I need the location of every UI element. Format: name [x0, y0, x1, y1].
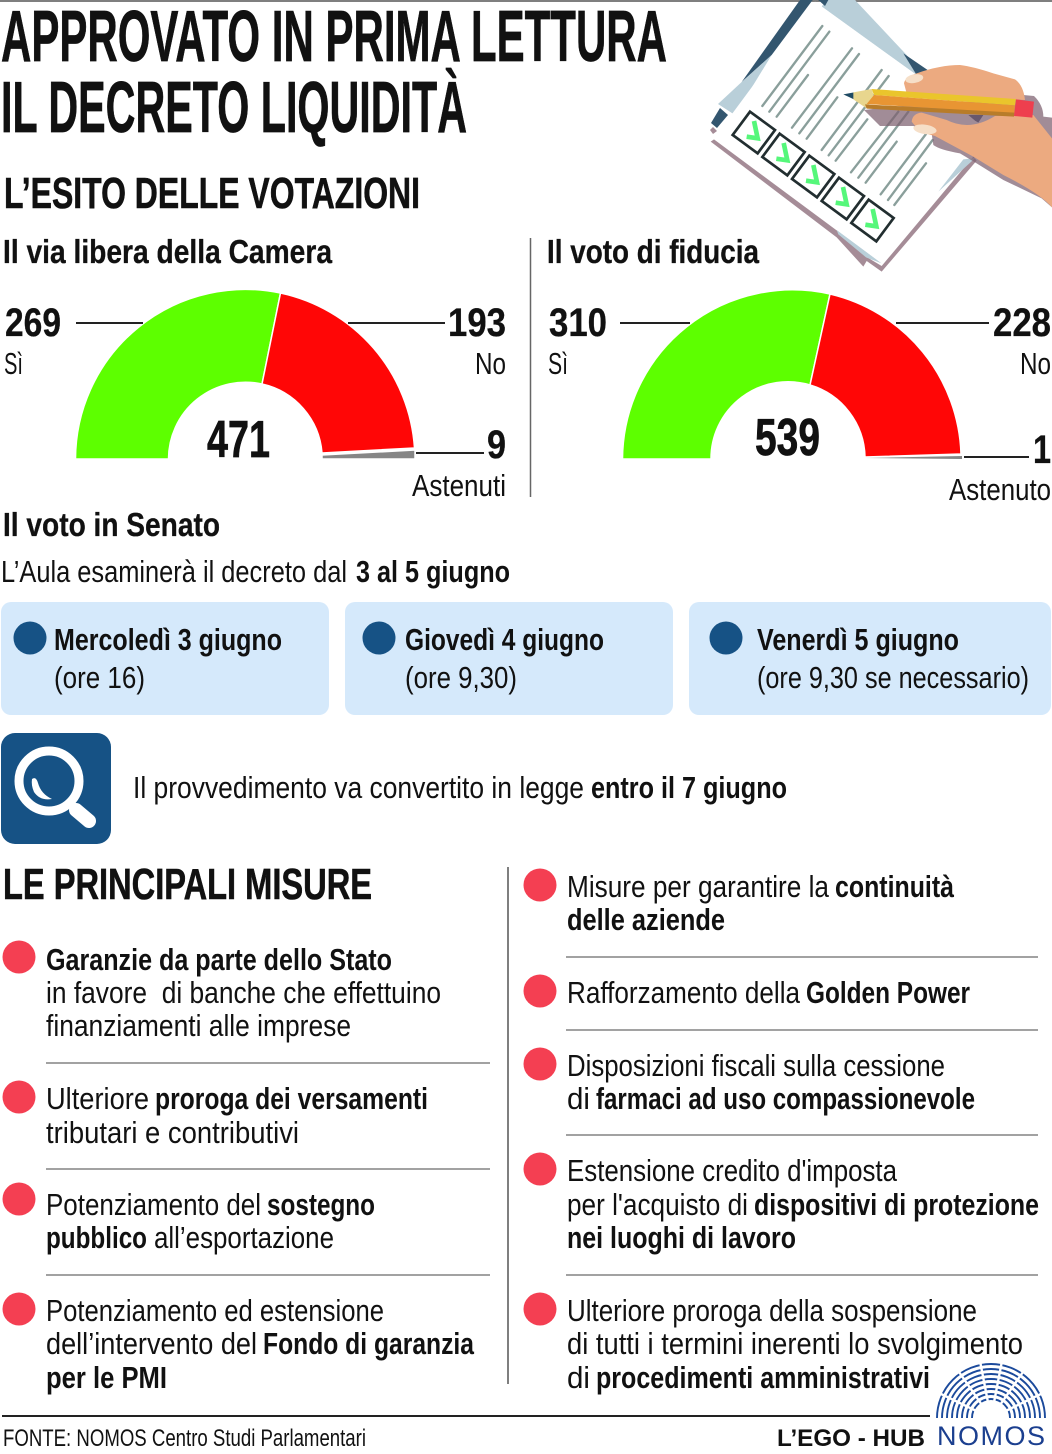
title — [1, 0, 667, 148]
measure: sostegno esportazione: all’esportazione — [154, 1220, 334, 1255]
label: 310 Sì: Sì — [548, 346, 568, 381]
label: 193 No: 193 — [448, 301, 506, 345]
measure: golden power — [524, 974, 970, 1010]
panel: Venerdì 5 giugno: Venerdì 5 giugno — [757, 622, 959, 657]
panel: Giovedì 4 giugno — [345, 602, 673, 715]
total: 539: 539 — [755, 409, 820, 467]
panel: Giovedì 4 giugno: Giovedì 4 giugno — [405, 622, 604, 657]
label: 269 Sì — [4, 301, 143, 381]
heading: il voto in Senato: Il voto in Senato — [3, 506, 220, 543]
measure: sostegno esportazione: Potenziamento del — [46, 1187, 261, 1222]
measure: garanzie: finanziamenti alle imprese — [46, 1008, 351, 1043]
heading: esito delle votazioni: L’ESITO DELLE VOTAZIONI — [4, 169, 420, 218]
label: 310 Sì — [548, 301, 690, 381]
label: 9 Astenuti: Astenuti — [412, 468, 506, 503]
heading: Camera: Il via libera della Camera — [3, 233, 333, 270]
measure: continuità aziende: continuità — [835, 869, 955, 904]
gauge chart: Camera — [76, 289, 415, 459]
label: 1 Astenuto — [949, 428, 1051, 507]
logo: Nomos: NOMOS — [937, 1421, 1045, 1451]
text: Aula esaminerà: L’Aula esaminerà il decreto dal — [1, 554, 347, 589]
measure: sospensione termini: di — [567, 1360, 590, 1395]
measure: farmaci — [524, 1048, 975, 1116]
measure: garanzie — [2, 940, 441, 1043]
label: 193 No — [348, 301, 506, 381]
measure: fondo di garanzia — [2, 1292, 475, 1395]
measure: credito d'imposta — [524, 1152, 1039, 1255]
label: 193 No: No — [475, 346, 506, 381]
logo: Nomos — [937, 1361, 1045, 1451]
measure: credito d'imposta: per l'acquisto di — [567, 1187, 748, 1222]
panel: il voto di fiducia — [547, 233, 1051, 507]
panel: Mercoledì 3 giugno — [1, 602, 329, 715]
measure: fondo di garanzia: Potenziamento ed estensione — [46, 1293, 384, 1328]
measure: sospensione termini — [524, 1292, 1023, 1395]
label: 9 Astenuti: 9 — [487, 423, 506, 467]
text: conversione in legge: entro il 7 giugno — [591, 770, 787, 805]
panel: il via libera della Camera — [3, 233, 506, 503]
label: 9 Astenuti — [412, 423, 506, 503]
measure: golden power: Golden Power — [806, 975, 970, 1010]
measure: proroga versamenti: Ulteriore — [46, 1081, 149, 1116]
credit: L’EGO - HUB — [777, 1425, 925, 1452]
measure: continuità aziende: delle aziende — [567, 902, 725, 937]
measure: sospensione termini: procedimenti amministrativi — [596, 1360, 930, 1395]
measure: sostegno esportazione — [2, 1182, 375, 1255]
icon: magnifying glass — [1, 733, 111, 844]
measure: garanzie: in favore di banche che effettuino — [46, 975, 441, 1010]
panel: Mercoledì 3 giugno: Mercoledì 3 giugno — [54, 622, 282, 657]
illustration: hand ticking a checklist — [710, 0, 1052, 272]
text: conversione in legge: Il provvedimento va convertito in legge — [133, 770, 584, 805]
measure: proroga versamenti: tributari e contributivi — [46, 1115, 299, 1150]
label: 269 Sì: Sì — [4, 346, 23, 381]
gauge chart: fiducia — [622, 290, 962, 459]
label: 310 Sì: 310 — [549, 301, 607, 345]
measure: continuità aziende — [524, 868, 955, 937]
measure: credito d'imposta: Estensione credito d'imposta — [567, 1153, 898, 1188]
measure: fondo di garanzia: per le PMI — [46, 1360, 167, 1395]
panel: Venerdì 5 giugno — [689, 602, 1051, 715]
heading: le principali misure: LE PRINCIPALI MISURE — [3, 860, 372, 909]
measure: fondo di garanzia: dell’intervento del — [46, 1326, 257, 1361]
title: IL DECRETO LIQUIDITÀ — [1, 68, 467, 148]
total: 471: 471 — [207, 411, 270, 469]
measure: proroga versamenti — [2, 1080, 428, 1150]
measure: golden power: Rafforzamento della — [567, 975, 801, 1010]
panel: Mercoledì 3 giugno: (ore 16) — [54, 660, 145, 695]
label: 269 Sì: 269 — [5, 301, 61, 345]
panel: Giovedì 4 giugno: (ore 9,30) — [405, 660, 517, 695]
measure: sostegno esportazione: pubblico — [46, 1220, 147, 1255]
measure: sostegno esportazione: sostegno — [267, 1187, 375, 1222]
measure: farmaci: di — [567, 1081, 590, 1116]
measure: fondo di garanzia: Fondo di garanzia — [263, 1326, 475, 1361]
measure: credito d'imposta: nei luoghi di lavoro — [567, 1220, 796, 1255]
text: Aula esaminerà: 3 al 5 giugno — [356, 554, 510, 589]
label: 228 No — [896, 301, 1051, 381]
measure: sospensione termini: Ulteriore proroga della sospensione — [567, 1293, 977, 1328]
measure: farmaci: Disposizioni fiscali sulla cessione — [567, 1048, 945, 1083]
measure: proroga versamenti: proroga dei versamenti — [155, 1081, 428, 1116]
heading: fiducia: Il voto di fiducia — [547, 233, 760, 270]
source: FONTE: NOMOS Centro Studi Parlamentari — [3, 1425, 366, 1452]
measure: continuità aziende: Misure per garantire la — [567, 869, 830, 904]
measure: garanzie: Garanzie da parte dello Stato — [46, 942, 392, 977]
